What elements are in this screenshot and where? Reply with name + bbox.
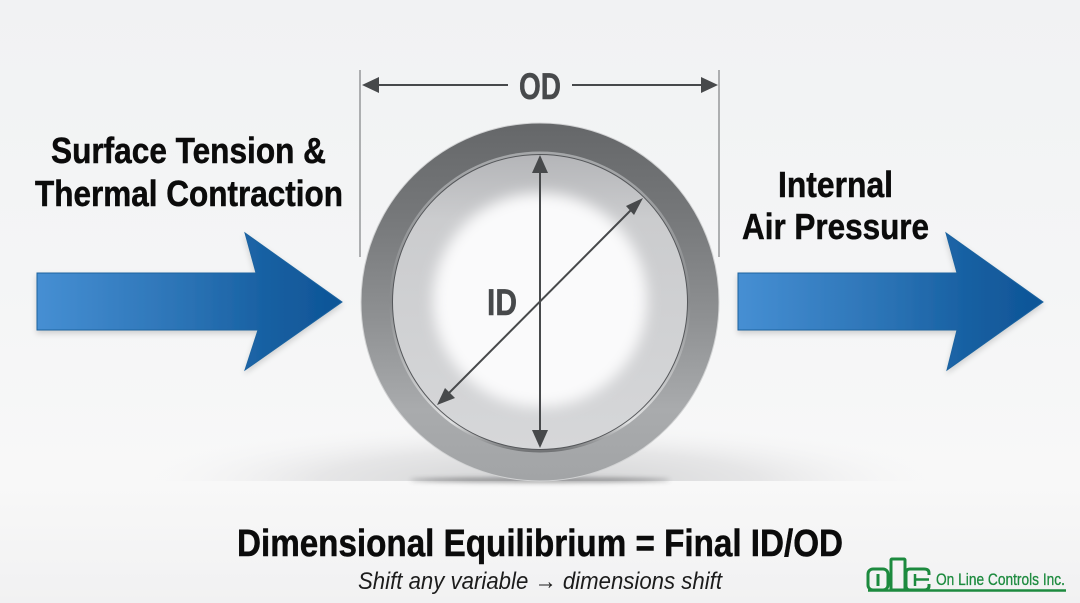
right heading: internal air pressure: Air Pressure [742, 206, 929, 247]
left blue arrow [37, 233, 342, 370]
ID dimension: ID [487, 282, 517, 323]
outer wall of tube [361, 123, 719, 481]
title: Dimensional Equilibrium = Final ID/OD [237, 523, 843, 565]
bore interior [392, 154, 688, 450]
inner chamfer ring [390, 152, 690, 452]
ID dimension [437, 155, 643, 448]
right blue arrow [738, 233, 1043, 370]
left heading: surface tension and thermal contraction [35, 130, 343, 214]
OD dimension [360, 66, 719, 257]
tube cross-section [361, 123, 719, 481]
logo: On Line Controls Inc. [868, 559, 1066, 590]
background [276, 446, 802, 486]
subtitle: Shift any variable → dimensions shift [358, 568, 723, 595]
right heading: internal air pressure [742, 164, 929, 247]
OD dimension: OD [519, 66, 561, 107]
left heading: surface tension and thermal contraction: Thermal Contraction [35, 173, 343, 214]
right heading: internal air pressure: Internal [778, 164, 893, 205]
logo mark [868, 559, 929, 590]
left heading: surface tension and thermal contraction: Surface Tension & [51, 130, 326, 171]
